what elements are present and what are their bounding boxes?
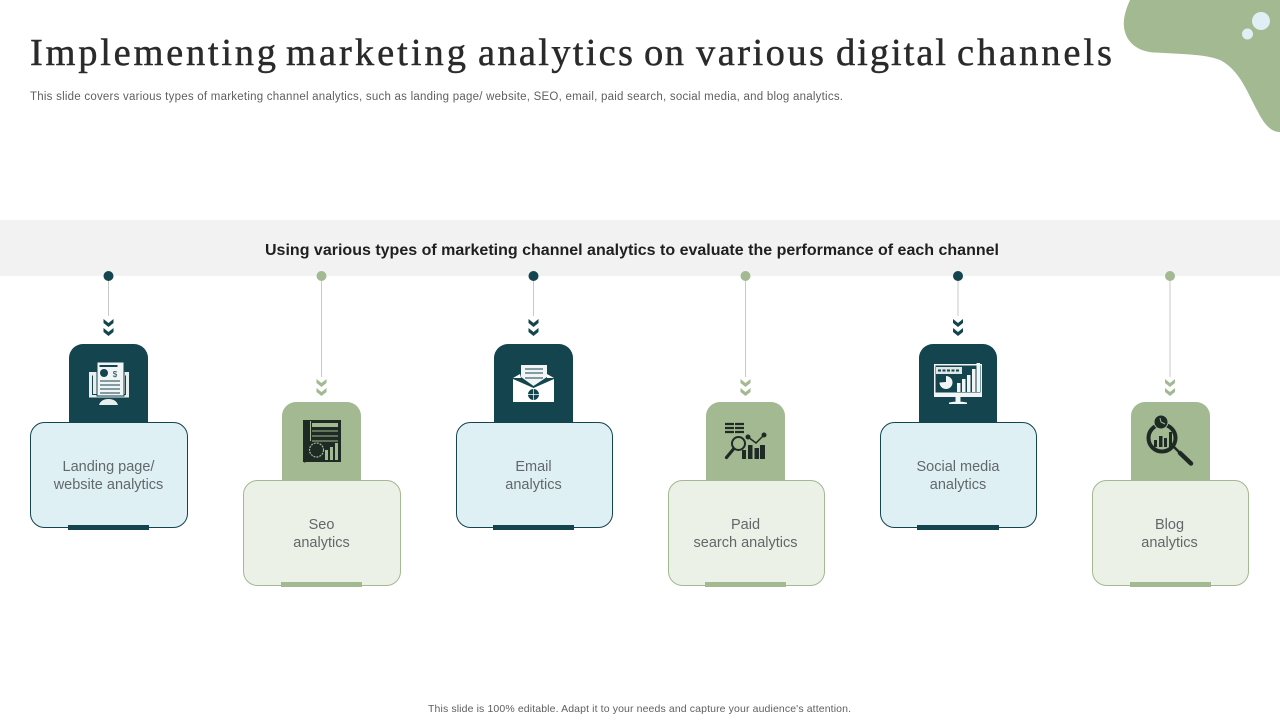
card bar 1	[68, 525, 149, 530]
icon: paid search chart	[725, 424, 766, 459]
subtitle: This slide covers various types of marketing channel analytics, such as landing page/ website, SEO, email, paid search, social media, and blog analytics.	[30, 91, 843, 103]
card bar 4	[705, 582, 786, 587]
icon: email envelope	[513, 365, 554, 402]
title: Implementing	[30, 32, 276, 74]
card 2	[244, 480, 400, 586]
tab 4	[706, 402, 785, 481]
connector 6	[1165, 271, 1175, 396]
icon: seo report	[303, 420, 341, 462]
title: on	[644, 32, 684, 74]
card bar 2	[281, 582, 362, 587]
icon: landing page report on monitor	[89, 362, 129, 405]
icon: landing page report on monitor: $	[113, 370, 118, 379]
label 1: website analytics	[53, 477, 163, 493]
label 6: analytics	[1141, 535, 1198, 551]
tab 6	[1131, 402, 1210, 481]
card bar 3	[493, 525, 574, 530]
tab 3	[494, 344, 573, 423]
footer note: This slide is 100% editable. Adapt it to your needs and capture your audience's attention.	[428, 703, 851, 715]
tab 2	[282, 402, 361, 481]
label 1: Landing page/	[63, 459, 155, 475]
title	[30, 32, 1112, 74]
label 5: analytics	[930, 477, 986, 493]
tab 5	[919, 344, 997, 423]
label 2: analytics	[293, 535, 350, 551]
label 6: Blog	[1155, 517, 1184, 533]
background blob	[1124, 0, 1280, 132]
column: paid search	[668, 271, 824, 587]
connector 4	[740, 271, 750, 396]
label 3: analytics	[505, 477, 562, 493]
title: channels	[957, 32, 1112, 74]
title: digital	[836, 32, 946, 74]
icon: social media dashboard monitor	[934, 363, 982, 404]
card bar 6	[1130, 582, 1211, 587]
connector 1	[104, 271, 114, 336]
card 1	[30, 422, 188, 528]
title: various	[696, 32, 824, 74]
column: blog	[1092, 271, 1248, 587]
card 3	[456, 422, 612, 528]
icon: blog analytics magnifier	[1148, 415, 1191, 464]
banner: Using various types of marketing channel analytics to evaluate the performance of each channel	[265, 242, 999, 259]
banner	[0, 220, 1280, 276]
connector 3	[528, 271, 538, 336]
column: landing page	[30, 271, 188, 530]
card 6	[1092, 480, 1248, 586]
label 5: Social media	[916, 459, 1000, 475]
label 4: search analytics	[694, 535, 797, 551]
column: email	[456, 271, 612, 530]
card bar 5	[917, 525, 999, 530]
label 3: Email	[515, 459, 552, 475]
tab 1	[69, 344, 148, 423]
connector 2	[316, 271, 326, 396]
title: marketing	[286, 32, 466, 74]
column: social media	[880, 271, 1036, 530]
label 4: Paid	[731, 517, 760, 533]
card 4	[668, 480, 824, 586]
label 2: Seo	[309, 517, 334, 533]
title: analytics	[478, 32, 633, 74]
card 5	[880, 422, 1036, 528]
column: seo	[244, 271, 400, 587]
connector 5	[953, 271, 963, 336]
